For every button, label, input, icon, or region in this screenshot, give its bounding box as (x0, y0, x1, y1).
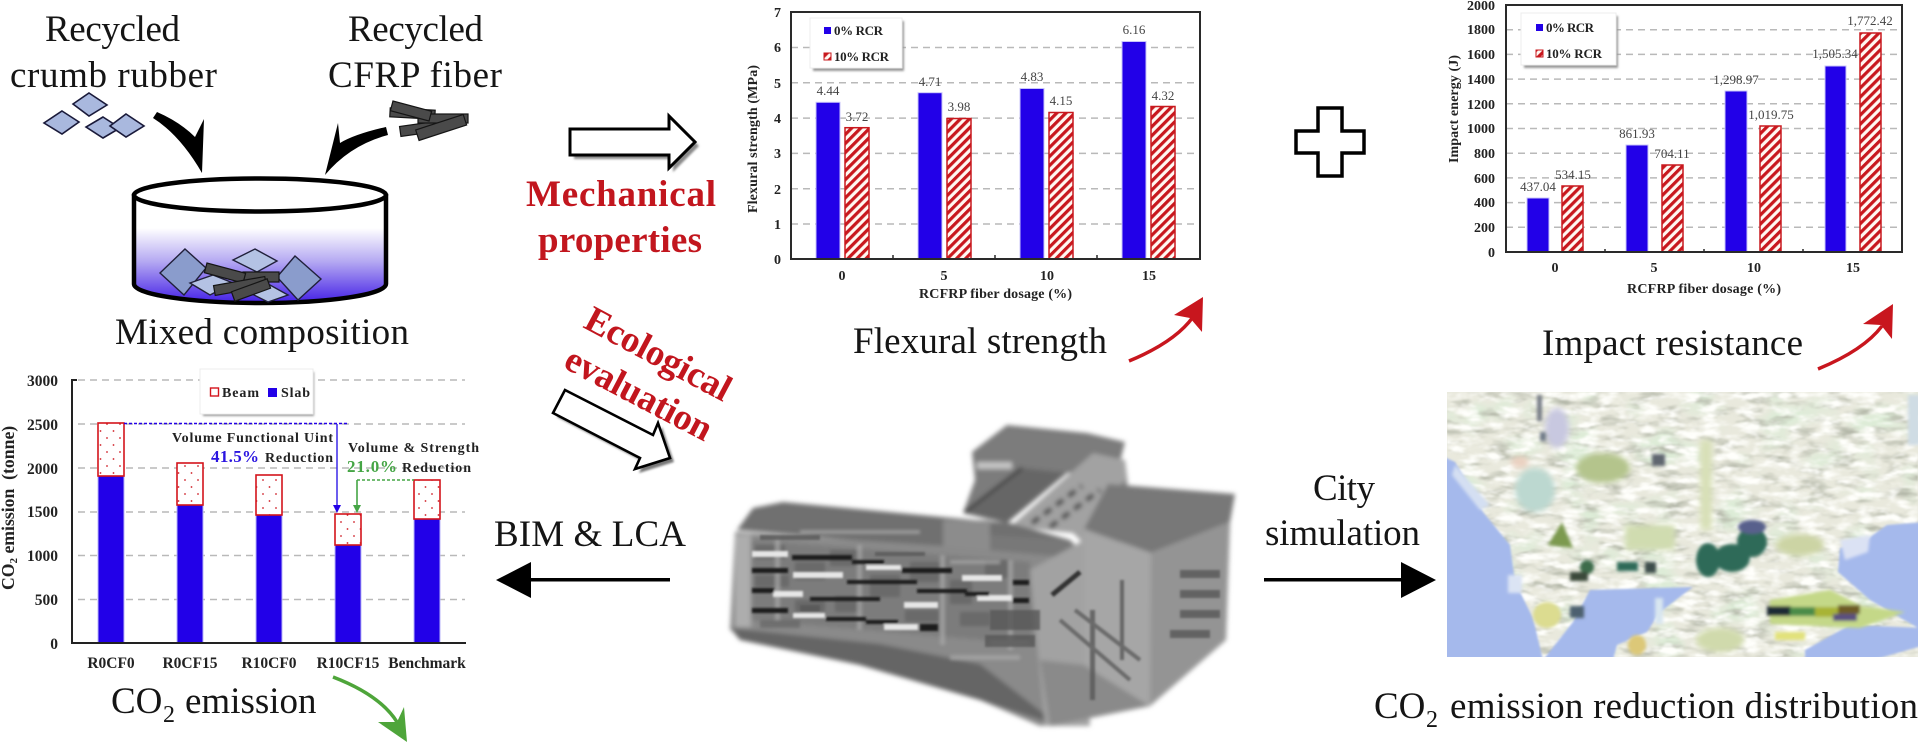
x axis labels: R0CF15 (162, 655, 218, 672)
y axis labels: 1200 (1467, 98, 1495, 113)
annotation: volume and strength reduction (347, 441, 479, 513)
legend: 10% RCR (1546, 46, 1603, 61)
annotation: volume functional unit reduction: Volume Functional Uint (172, 431, 333, 446)
y axis labels: 4 (774, 112, 781, 127)
y axis labels (1467, 0, 1495, 261)
label: city simulation (1265, 468, 1420, 554)
label: ecological evaluation: evaluation (558, 339, 720, 450)
value labels: 437.04 (1520, 179, 1556, 194)
bars: 10 percent RCR (1562, 33, 1881, 252)
x axis labels: 5 (1650, 261, 1658, 276)
label: city simulation: City (1313, 468, 1376, 509)
annotation: volume functional unit reduction: Reduction (265, 451, 333, 466)
y axis labels (27, 373, 58, 653)
bars: beam (98, 423, 440, 545)
value labels: 3.72 (846, 109, 868, 124)
icon: CFRP fiber pieces (390, 101, 468, 140)
x axis labels (1552, 261, 1860, 276)
y axis labels: 1500 (27, 504, 58, 521)
annotation: volume and strength reduction: Reduction (402, 461, 471, 476)
annotation: volume and strength reduction: Volume & Strength (348, 441, 479, 456)
value labels: 4.83 (1021, 69, 1043, 84)
value labels: 1,298.97 (1713, 72, 1759, 87)
value labels: 861.93 (1619, 126, 1655, 141)
arrow: to mechanical properties (570, 116, 699, 172)
value labels (1520, 13, 1893, 194)
heading: recycled crumb rubber (10, 9, 217, 96)
arrow: CO2 emission decrease (333, 677, 407, 742)
back block (963, 425, 1125, 513)
heading: recycled crumb rubber: crumb rubber (10, 55, 217, 96)
value labels: 4.32 (1152, 88, 1174, 103)
value labels: 4.44 (817, 83, 840, 98)
chart: impact resistance (1447, 0, 1902, 297)
caption: impact resistance: Impact resistance (1542, 323, 1803, 364)
legend: 0% RCR (1546, 20, 1595, 35)
y axis labels: 1800 (1467, 23, 1495, 38)
y axis labels: 5 (774, 77, 781, 92)
legend: 10% RCR (834, 49, 890, 64)
y axis labels: 3000 (27, 373, 58, 390)
water (1440, 455, 1920, 660)
arrow: building to CO2 chart (496, 562, 670, 598)
right wing (1084, 522, 1230, 706)
arrow: impact resistance increase (1818, 304, 1893, 369)
value labels: 4.71 (919, 74, 941, 89)
bars: 0 percent RCR (1527, 66, 1846, 252)
y axis labels: 2000 (27, 461, 58, 478)
x axis labels: 5 (940, 269, 948, 284)
icon: plus sign (1296, 108, 1364, 176)
value labels: 534.15 (1555, 167, 1591, 182)
x axis labels: R10CF15 (317, 655, 380, 672)
y axis labels: 7 (774, 6, 781, 21)
legend (200, 369, 314, 416)
bars: 10 percent RCR (845, 106, 1175, 259)
caption: mixed composition: Mixed composition (115, 312, 409, 353)
right roof (1084, 484, 1235, 553)
value labels: 704.11 (1654, 146, 1690, 161)
y axis labels: 600 (1474, 172, 1495, 187)
bars: slab (98, 476, 440, 643)
illustration: BIM building model (730, 425, 1235, 726)
left roof (737, 502, 1070, 557)
legend: 0% RCR (834, 23, 884, 38)
y axis labels: 1000 (1467, 122, 1495, 137)
caption: CO2 emission reduction distribution: CO (1374, 686, 1425, 727)
caption: CO2 emission: 2 (163, 702, 175, 728)
window streaks (752, 551, 1012, 630)
legend: Slab (281, 386, 310, 401)
x axis labels: 15 (1142, 269, 1156, 284)
y axis labels: 0 (1488, 246, 1495, 261)
annotation: volume functional unit reduction (124, 424, 347, 513)
label: BIM and LCA: BIM & LCA (494, 514, 686, 555)
heading: recycled CFRP fiber: Recycled (348, 9, 484, 50)
chart: CO2 emission (0, 369, 479, 672)
x axis labels (838, 269, 1156, 284)
x axis title: RCFRP fiber dosage (%) (919, 287, 1072, 302)
arrow: building to map (1264, 562, 1436, 598)
caption: CO2 emission: CO (111, 681, 162, 722)
chart: flexural strength (746, 6, 1200, 302)
arrow: rubber into bowl (153, 112, 204, 173)
value labels: 1,505.34 (1812, 46, 1858, 61)
y axis labels: 6 (774, 41, 781, 56)
y axis labels: 0 (50, 636, 58, 653)
value labels: 1,019.75 (1748, 107, 1794, 122)
icon: mixing bowl (134, 178, 386, 303)
heading: recycled CFRP fiber (328, 9, 502, 96)
arrow: fiber into bowl (325, 123, 388, 175)
left facade (730, 532, 1085, 726)
arrow: flexural strength increase (1129, 297, 1203, 361)
y axis labels: 0 (774, 253, 781, 268)
x axis labels: Benchmark (388, 655, 466, 672)
y axis labels: 1000 (27, 548, 58, 565)
y axis title: Flexural strength (MPa) (746, 65, 761, 213)
label: ecological evaluation (558, 299, 738, 450)
y axis labels: 3 (774, 147, 781, 162)
gridlines (78, 380, 465, 600)
caption: flexural strength: Flexural strength (853, 321, 1108, 362)
value labels (817, 22, 1174, 124)
label: mechanical properties: Mechanical (526, 174, 716, 215)
y axis labels: 500 (35, 592, 58, 609)
annotation: volume functional unit reduction: 41.5% (211, 447, 259, 466)
plot frame (791, 12, 1200, 259)
bars: 0 percent RCR (816, 42, 1146, 259)
y axis labels: 1400 (1467, 73, 1495, 88)
legend (810, 18, 904, 71)
value labels: 4.15 (1050, 93, 1072, 108)
illustration: city map of emission reductions (1440, 392, 1920, 660)
x axis labels: 15 (1846, 261, 1860, 276)
value labels: 1,772.42 (1847, 13, 1893, 28)
caption: CO2 emission reduction distribution: 2 (1426, 707, 1438, 733)
label: mechanical properties (526, 174, 716, 261)
y axis labels: 800 (1474, 147, 1495, 162)
label: mechanical properties: properties (538, 220, 702, 261)
x axis labels: 0 (1552, 261, 1558, 276)
emission plume (1770, 590, 1905, 628)
heading: recycled CFRP fiber: CFRP fiber (328, 55, 502, 96)
legend: Beam (222, 386, 259, 401)
x axis ticks (893, 255, 1097, 259)
y axis labels (774, 6, 781, 268)
y axis labels: 200 (1474, 221, 1495, 236)
label: city simulation: simulation (1265, 513, 1420, 554)
y axis labels: 2500 (27, 417, 58, 434)
x axis labels: 0 (838, 269, 846, 284)
label: ecological evaluation: Ecological (578, 299, 738, 410)
x axis title: RCFRP fiber dosage (%) (1627, 282, 1781, 297)
value labels: 6.16 (1123, 22, 1146, 37)
caption: CO2 emission reduction distribution: emission reduction distribution (1450, 686, 1918, 727)
land texture (1447, 392, 1918, 657)
y axis labels: 2 (774, 183, 781, 198)
caption: CO2 emission: emission (185, 681, 317, 722)
x axis labels: R0CF0 (87, 655, 135, 672)
axes (72, 380, 466, 643)
legend (1521, 13, 1618, 68)
x axis labels: 10 (1040, 269, 1054, 284)
dark green reduction patches (1617, 527, 1767, 577)
y axis title: 2 (8, 557, 20, 563)
x axis labels: R10CF0 (241, 655, 297, 672)
y axis title: Impact energy (J) (1447, 55, 1462, 163)
gridlines (1506, 30, 1902, 227)
icon: crumb rubber pieces (44, 93, 144, 138)
x axis labels: 10 (1747, 261, 1761, 276)
x axis ticks (1605, 249, 1803, 252)
facade tone grid (755, 545, 1009, 628)
y axis labels: 1 (774, 218, 781, 233)
value labels: 3.98 (948, 99, 970, 114)
plot frame (1506, 5, 1902, 252)
heading: recycled crumb rubber: Recycled (45, 9, 180, 50)
annotation: volume and strength reduction: 21.0% (347, 457, 397, 476)
y axis labels: 400 (1474, 196, 1495, 211)
arrow: to ecological evaluation (553, 390, 674, 473)
y axis labels: 1600 (1467, 48, 1495, 63)
x axis labels (87, 655, 466, 672)
gridlines (791, 48, 1200, 224)
